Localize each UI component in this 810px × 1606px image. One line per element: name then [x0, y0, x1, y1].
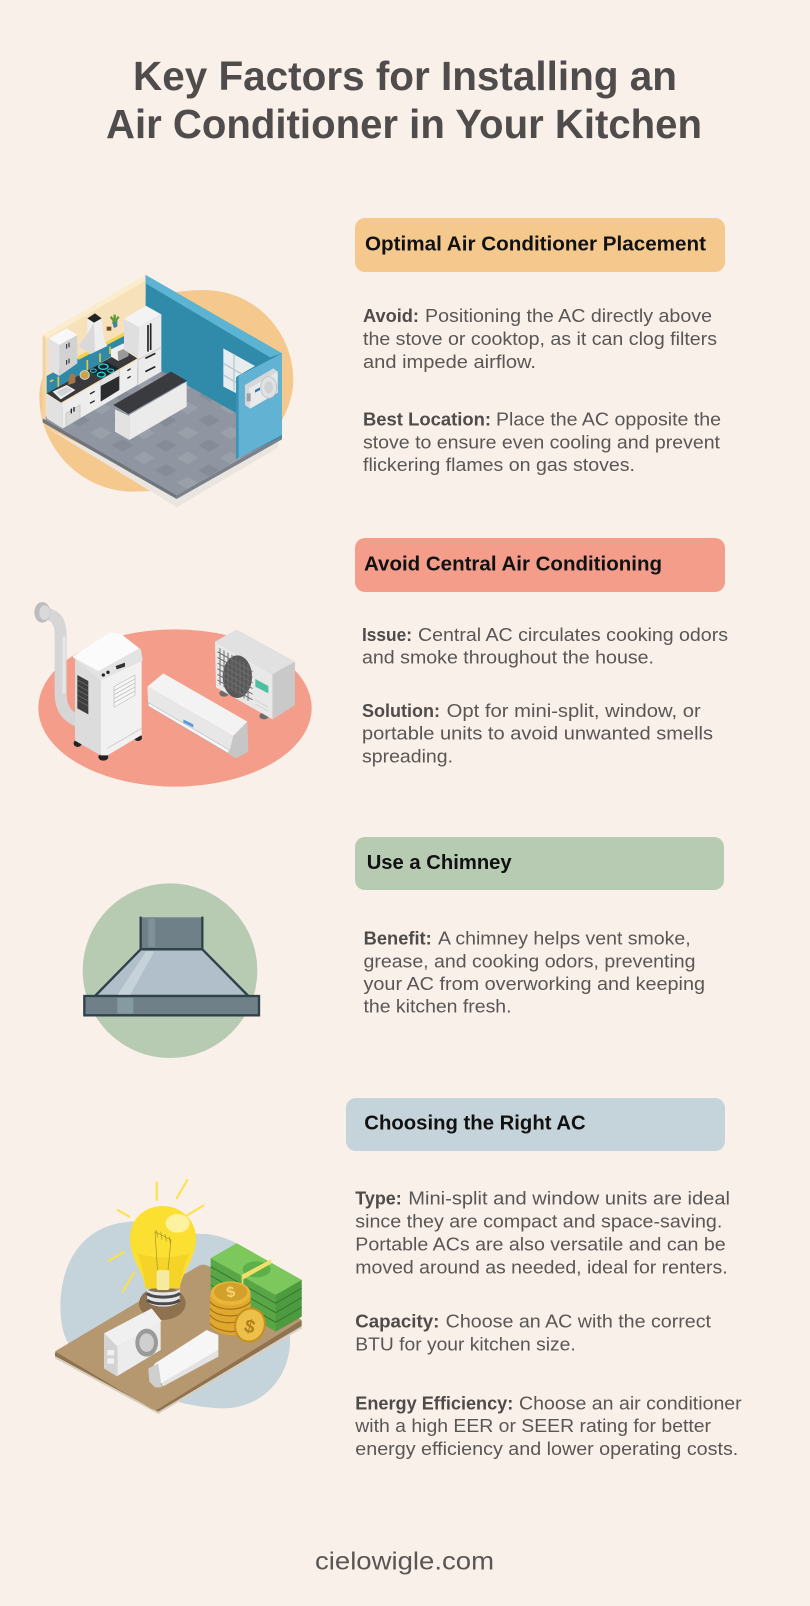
footer: website: cielowigle.com	[315, 1548, 494, 1576]
text block: best location: Place the AC opposite the	[496, 410, 721, 430]
heading	[346, 1098, 725, 1151]
text block: capacity	[355, 1311, 711, 1354]
heading: Avoid Central Air Conditioning	[364, 553, 662, 576]
text block: solution: Opt for mini-split, window, or	[447, 701, 701, 721]
text block: energy efficiency: Choose an air conditioner	[519, 1393, 742, 1413]
island	[115, 409, 129, 440]
text block: type: since they are compact and space-saving.	[355, 1212, 722, 1232]
text block: issue: Central AC circulates cooking odors	[418, 625, 728, 645]
outdoor unit	[219, 690, 229, 697]
text block: type: Type:	[355, 1189, 402, 1209]
text block: issue	[362, 625, 728, 668]
text block: capacity: Capacity:	[355, 1311, 439, 1331]
text block: avoid: Avoid:	[363, 306, 419, 326]
wall split unit	[147, 673, 247, 736]
illustration: bulb, money and AC units: $	[225, 1283, 237, 1302]
text block: best location: flickering flames on gas stoves.	[363, 455, 635, 475]
fridge	[124, 306, 161, 327]
text block: avoid: and impede airflow.	[363, 352, 536, 372]
text block: energy efficiency	[354, 1393, 742, 1459]
banknote stack	[211, 1243, 302, 1332]
title: Key Factors for Installing an	[133, 53, 677, 99]
text block: issue: Issue:	[362, 625, 412, 645]
heading: Choosing the Right AC	[364, 1112, 586, 1135]
portable unit exhaust pipe	[43, 613, 77, 721]
text block: type: Portable ACs are also versatile and can be	[355, 1234, 726, 1254]
heading: Use a Chimney	[367, 851, 512, 874]
heading	[355, 837, 724, 890]
text block: issue: and smoke throughout the house.	[362, 648, 654, 668]
heading	[355, 218, 725, 272]
text block: benefit: Benefit:	[364, 928, 432, 948]
text block: energy efficiency: Energy Efficiency:	[355, 1393, 513, 1413]
text block: solution	[362, 701, 713, 766]
illustration: bulb, money and AC units	[55, 1180, 302, 1414]
text block: best location	[363, 410, 721, 475]
panel: choosing the right AC	[55, 1098, 742, 1459]
panel: optimal placement	[39, 218, 725, 507]
panel: use a chimney	[83, 837, 724, 1058]
illustration: isometric kitchen	[39, 275, 293, 507]
title: Air Conditioner in Your Kitchen	[106, 101, 702, 147]
indoor AC unit	[148, 1330, 218, 1383]
text block: energy efficiency: energy efficiency and lower operating costs.	[355, 1439, 738, 1459]
text block: benefit: grease, and cooking odors, preventing	[364, 951, 696, 971]
panel: avoid central AC	[34, 538, 728, 787]
outdoor AC unit	[104, 1308, 162, 1347]
text block: energy efficiency: with a high EER or SEER rating for better	[354, 1416, 711, 1436]
portable unit	[74, 740, 82, 747]
text block: benefit	[364, 928, 705, 1017]
text block: avoid: Positioning the AC directly above	[425, 306, 712, 326]
text block: benefit: A chimney helps vent smoke,	[438, 928, 691, 948]
illustration: bulb, money and AC units: $	[242, 1315, 258, 1338]
heading: Optimal Air Conditioner Placement	[365, 233, 706, 256]
text block: solution: spreading.	[362, 746, 453, 766]
illustration: chimney hood	[83, 883, 259, 1058]
text block: capacity: BTU for your kitchen size.	[355, 1334, 576, 1354]
title	[106, 53, 702, 147]
text block: type: moved around as needed, ideal for renters.	[355, 1257, 728, 1277]
text block: benefit: your AC from overworking and keeping	[364, 974, 705, 994]
text block: solution: portable units to avoid unwanted smells	[362, 724, 713, 744]
text block: best location: Best Location:	[363, 410, 491, 430]
text block: best location: stove to ensure even cooling and prevent	[363, 432, 720, 452]
text block: avoid: the stove or cooktop, as it can clog filters	[363, 329, 717, 349]
text block: solution: Solution:	[362, 701, 440, 721]
coin stacks	[210, 1295, 251, 1335]
text block: capacity: Choose an AC with the correct	[446, 1311, 711, 1331]
illustration: air conditioner types	[34, 602, 312, 787]
text block: benefit: the kitchen fresh.	[364, 997, 512, 1017]
kitchen back: backsplash, cabinets, hood	[47, 333, 124, 394]
light bulb	[130, 1206, 196, 1288]
text block: type: Mini-split and window units are ideal	[408, 1189, 730, 1209]
text block: type	[355, 1189, 730, 1277]
text block: avoid	[363, 306, 717, 372]
counter and lower cabinets	[47, 395, 63, 428]
heading	[355, 538, 725, 592]
